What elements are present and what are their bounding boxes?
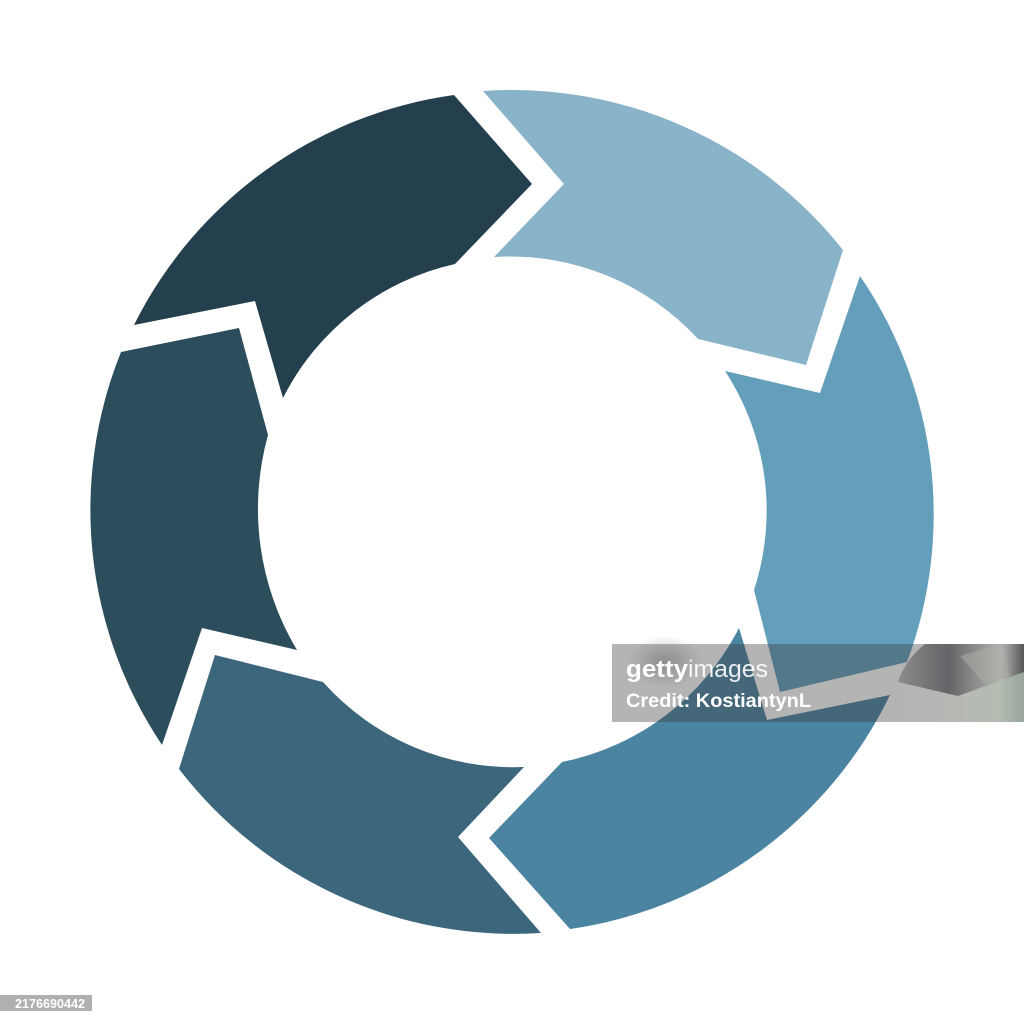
arrow segment 1: light blue [483,90,843,365]
image id number: 2176690442 [15,997,85,1011]
image id tag [0,995,92,1011]
arrow segment 5: dark slate [90,328,297,745]
arrow segment 3: deep blue [489,628,890,929]
arrow segment 6: darkest slate [134,95,532,398]
watermark banner [612,636,1024,722]
watermark logo text light: images [688,656,768,683]
arrow segment 4: slate blue [179,655,541,934]
watermark logo text: getty [626,656,689,683]
arrow segment 2: medium blue [725,276,934,692]
watermark credit: Credit: KostiantynL [626,691,811,712]
